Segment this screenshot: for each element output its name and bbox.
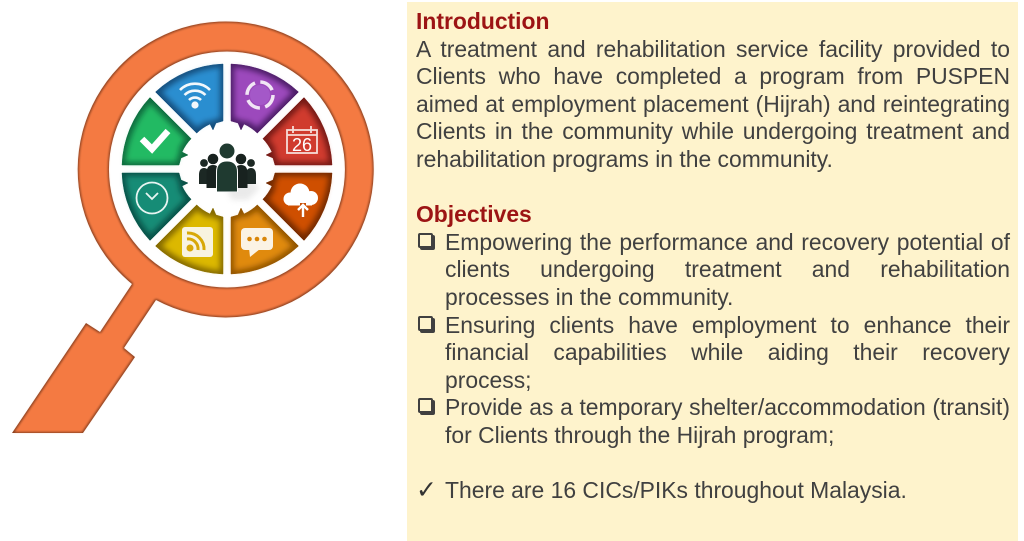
text block: introduction paragraph: rehabilitation programs in the community. xyxy=(416,146,833,172)
text block: introduction paragraph: A treatment and rehabilitation service facility provided to xyxy=(416,36,1010,62)
callout: number of centres: There are 16 CICs/PIKs throughout Malaysia. xyxy=(445,477,907,503)
icon: clock xyxy=(136,182,168,214)
text block: introduction paragraph: Clients who have completed a program from PUSPEN xyxy=(416,63,1010,89)
icon: wifi xyxy=(180,84,210,109)
magnifying glass illustration xyxy=(12,20,374,434)
icon: cloud upload xyxy=(284,184,318,219)
text block: introduction paragraph: Clients in the community while undergoing treatment and xyxy=(416,118,1010,144)
icon: sync xyxy=(247,82,273,108)
icon: group of people xyxy=(199,144,260,200)
heading: Introduction: Introduction xyxy=(416,8,550,34)
icon: calendar: 26 xyxy=(292,135,312,155)
callout: number of centres: ✓ xyxy=(416,475,437,504)
text block: introduction paragraph: aimed at employment placement (Hijrah) and reintegrating xyxy=(416,91,1010,117)
objective 1 xyxy=(418,229,1010,310)
icon: check mark xyxy=(142,131,168,149)
objective 3: for Clients through the Hijrah program; xyxy=(445,422,834,448)
icon: RSS xyxy=(182,227,213,257)
magnifier frame: ring and handle xyxy=(12,21,374,433)
segment: teal clock xyxy=(122,173,191,240)
panel: text background xyxy=(407,2,1018,541)
segment: green check xyxy=(122,98,191,165)
objective 1: Empowering the performance and recovery potential of xyxy=(445,229,1010,255)
objective 2 xyxy=(418,312,1010,393)
segment: amber chat xyxy=(231,205,298,274)
objective 2: Ensuring clients have employment to enhance their xyxy=(445,312,1010,338)
segment: red calendar xyxy=(263,98,332,165)
objective 1: processes in the community. xyxy=(445,284,733,310)
objective 2: financial capabilities while aiding their recovery xyxy=(445,339,1010,365)
objective 2: process; xyxy=(445,367,532,393)
segment: blue wifi xyxy=(156,64,223,133)
icon: chat bubble xyxy=(241,228,273,257)
segment: yellow RSS xyxy=(156,205,223,274)
text block: introduction paragraph xyxy=(416,36,1010,172)
objective 1: clients undergoing treatment and rehabilitation xyxy=(445,256,1010,282)
segment: purple sync xyxy=(231,64,298,133)
objective 3: Provide as a temporary shelter/accommodation (transit) xyxy=(445,394,1010,420)
heading: Objectives: Objectives xyxy=(416,201,532,227)
segment: dark orange cloud upload xyxy=(263,173,332,240)
objective 3 xyxy=(418,394,1010,448)
